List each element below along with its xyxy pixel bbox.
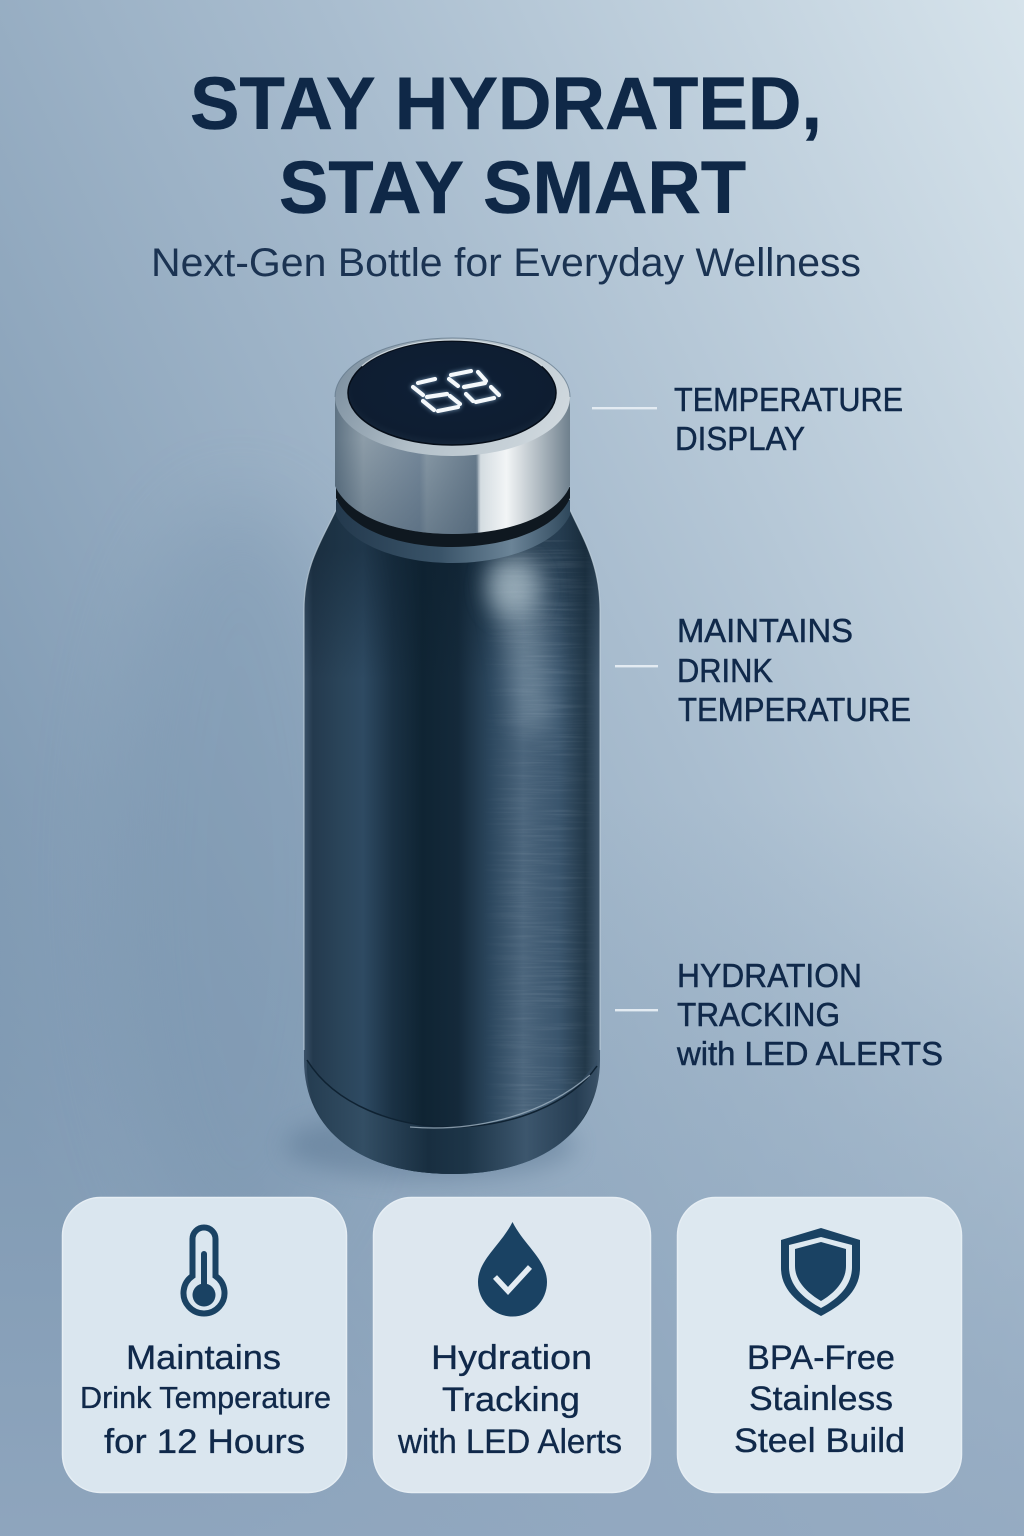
callout: hydration tracking: TRACKING <box>677 996 840 1033</box>
LED reading 68 glow <box>413 371 499 411</box>
card text: with LED Alerts <box>397 1423 622 1461</box>
neck ring <box>336 500 570 563</box>
icon: shield <box>781 1228 860 1316</box>
callout: maintains drink temperature: TEMPERATURE <box>678 691 911 728</box>
LED reading 68 <box>413 371 499 411</box>
card text: BPA-Free <box>747 1339 895 1377</box>
panel: BPA-free card <box>678 1198 962 1492</box>
metal cap side <box>335 397 570 534</box>
card text: Tracking <box>442 1381 580 1419</box>
metal cap top rim <box>335 338 570 456</box>
display face <box>348 341 556 445</box>
card text: Stainless <box>749 1380 893 1418</box>
callout: hydration tracking: HYDRATION <box>677 957 862 994</box>
bottle <box>285 338 610 1179</box>
bottle shadow <box>285 1111 575 1179</box>
body shading, highlight and brushed texture <box>304 512 600 1134</box>
icon: water drop with check <box>478 1222 547 1316</box>
callout: maintains drink temperature: MAINTAINS <box>677 612 853 649</box>
panel: hydration card <box>374 1198 650 1492</box>
title: STAY SMART <box>279 146 746 229</box>
callout: hydration tracking <box>615 957 943 1072</box>
black gasket <box>336 487 570 547</box>
card text: Steel Build <box>734 1422 905 1460</box>
panel: temperature card <box>62 1198 346 1492</box>
callout: maintains drink temperature: DRINK <box>677 652 773 689</box>
bottle body <box>304 510 600 1174</box>
title <box>190 62 822 229</box>
callout: temperature display <box>592 381 912 457</box>
card text: Hydration <box>431 1339 592 1377</box>
callout: maintains drink temperature <box>615 612 911 728</box>
callout: temperature display: DISPLAY <box>675 420 805 457</box>
subtitle: Next-Gen Bottle for Everyday Wellness <box>151 241 861 285</box>
body rim light <box>304 510 600 1050</box>
card text: Maintains <box>126 1339 281 1377</box>
callout: hydration tracking: with LED ALERTS <box>676 1035 943 1072</box>
title: STAY HYDRATED, <box>190 62 822 145</box>
card text: for 12 Hours <box>104 1423 305 1461</box>
card text: Drink Temperature <box>80 1380 331 1415</box>
body base band <box>307 1060 597 1174</box>
callout: temperature display: TEMPERATURE <box>674 381 903 418</box>
icon: thermometer <box>183 1228 225 1313</box>
